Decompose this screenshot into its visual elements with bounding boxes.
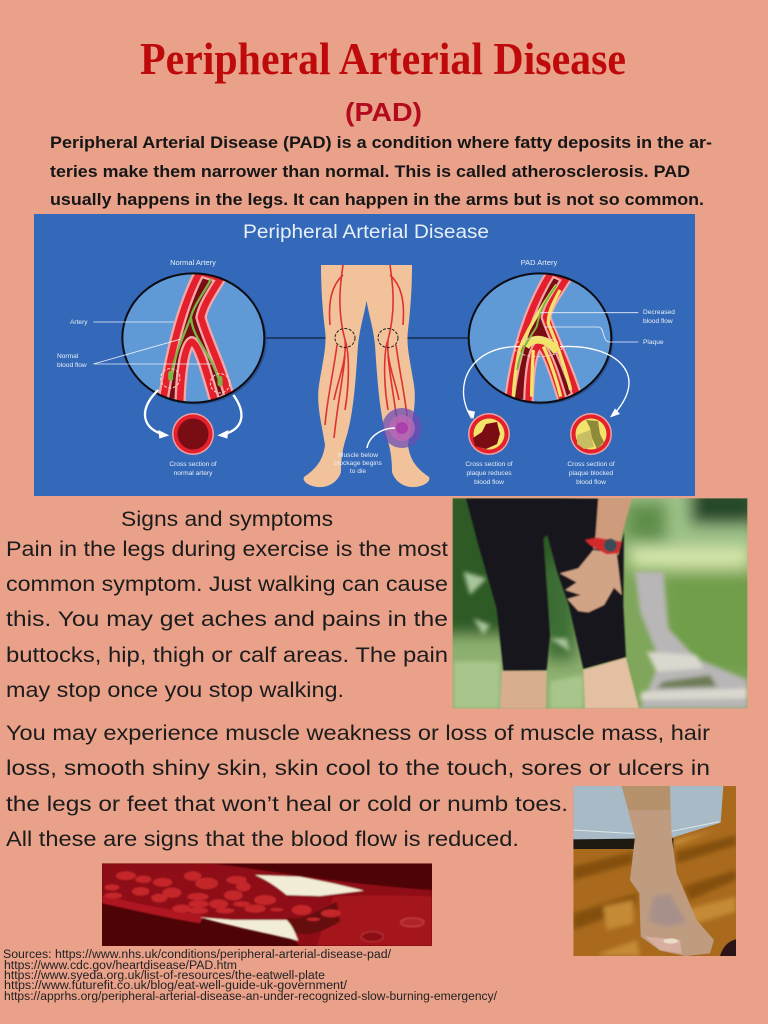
normal artery magnifier	[93, 272, 267, 439]
label: plaque: Plaque	[643, 339, 664, 346]
plaque cross section reduced	[468, 413, 510, 455]
text block: pain paragraph: Pain in the legs during exercise is the most	[6, 537, 448, 561]
text block: other signs paragraph: the legs or feet that won’t heal or cold or numb toes.	[6, 792, 568, 816]
label: normal blood flow	[57, 353, 87, 369]
diagram heading: Peripheral Arterial Disease	[243, 222, 489, 243]
label: decreased blood flow	[643, 309, 675, 325]
text block: other signs paragraph: You may experience muscle weakness or loss of muscle mass, hair	[6, 721, 710, 745]
label: blocked cross section	[567, 461, 615, 486]
label: reduced cross section: blood flow	[474, 479, 504, 486]
label: normal cross section: Cross section of	[169, 461, 217, 468]
text block: pain paragraph: may stop once you stop walking.	[6, 678, 344, 702]
sources list: https://apprhs.org/peripheral-arterial-disease-an-under-recognized-slow-burning-emergency/	[4, 991, 498, 1003]
label: reduced cross section: plaque reduces	[466, 470, 512, 477]
intro text block: Peripheral Arterial Disease (PAD) is a condition where fatty deposits in the ar-	[50, 133, 712, 152]
sources list: https://www.futurefit.co.uk/blog/eat-well-guide-uk-government/	[4, 980, 348, 992]
text block: pain paragraph	[6, 537, 448, 702]
sources list: Sources: https://www.nhs.uk/conditions/peripheral-arterial-disease-pad/	[3, 949, 392, 961]
text block: other signs paragraph: loss, smooth shiny skin, skin cool to the touch, sores or ulcers in	[6, 756, 710, 780]
connector lines	[265, 337, 468, 339]
label: blocked cross section: blood flow	[576, 479, 606, 486]
muscle blockage glow	[382, 408, 422, 448]
label: muscle blockage	[334, 452, 383, 475]
label: normal cross section	[169, 461, 217, 477]
intro text block	[50, 133, 712, 209]
arrow: muscle blockage	[367, 428, 395, 448]
text block: pain paragraph: buttocks, hip, thigh or calf areas. The pain	[6, 643, 448, 667]
subtitle: (PAD)	[345, 97, 422, 127]
label: decreased blood flow: blood flow	[643, 318, 673, 325]
text block: pain paragraph: this. You may get aches and pains in the	[6, 607, 448, 631]
text block: other signs paragraph	[6, 721, 710, 851]
label: reduced cross section: Cross section of	[465, 461, 513, 468]
PAD artery heading: PAD Artery	[521, 258, 558, 267]
normal cross section	[172, 413, 214, 455]
label: decreased blood flow: Decreased	[643, 309, 675, 316]
label: normal blood flow: Normal	[57, 353, 79, 360]
plaque cross section blocked	[570, 413, 612, 455]
label: muscle blockage: blockage begins	[334, 460, 383, 467]
label: artery: Artery	[70, 319, 88, 326]
sources list	[3, 949, 498, 1003]
panel: blue PAD diagram	[34, 214, 695, 496]
text block: other signs paragraph: All these are signs that the blood flow is reduced.	[6, 827, 519, 851]
title: Peripheral Arterial Disease	[140, 33, 626, 84]
marker: left knee	[335, 328, 355, 348]
photo: blocked artery with red blood cells	[102, 863, 432, 946]
label: muscle blockage: to die	[350, 468, 366, 475]
PAD artery magnifier	[464, 272, 638, 419]
photo: foot on wooden floor	[573, 786, 736, 956]
intro text block: teries make them narrower than normal. This is called atherosclerosis. PAD	[50, 162, 690, 181]
intro text block: usually happens in the legs. It can happen in the arms but is not so common.	[50, 190, 704, 209]
normal artery heading: Normal Artery	[170, 258, 216, 267]
sources list: https://www.syeda.org.uk/list-of-resources/the-eatwell-plate	[4, 970, 325, 982]
marker: right knee	[378, 328, 398, 348]
label: muscle blockage: Muscle below	[338, 452, 378, 459]
label: normal cross section: normal artery	[174, 470, 213, 477]
heading: signs and symptoms: Signs and symptoms	[121, 508, 333, 531]
text block: pain paragraph: common symptom. Just walking can cause	[6, 572, 448, 596]
label: blocked cross section: Cross section of	[567, 461, 615, 468]
illustration: legs	[304, 265, 429, 487]
sources list: https://www.cdc.gov/heartdisease/PAD.htm	[4, 960, 237, 972]
label: reduced cross section	[465, 461, 513, 486]
label: normal blood flow: blood flow	[57, 362, 87, 369]
label: blocked cross section: plaque blocked	[569, 470, 614, 477]
photo: runner holding thigh	[452, 498, 748, 708]
